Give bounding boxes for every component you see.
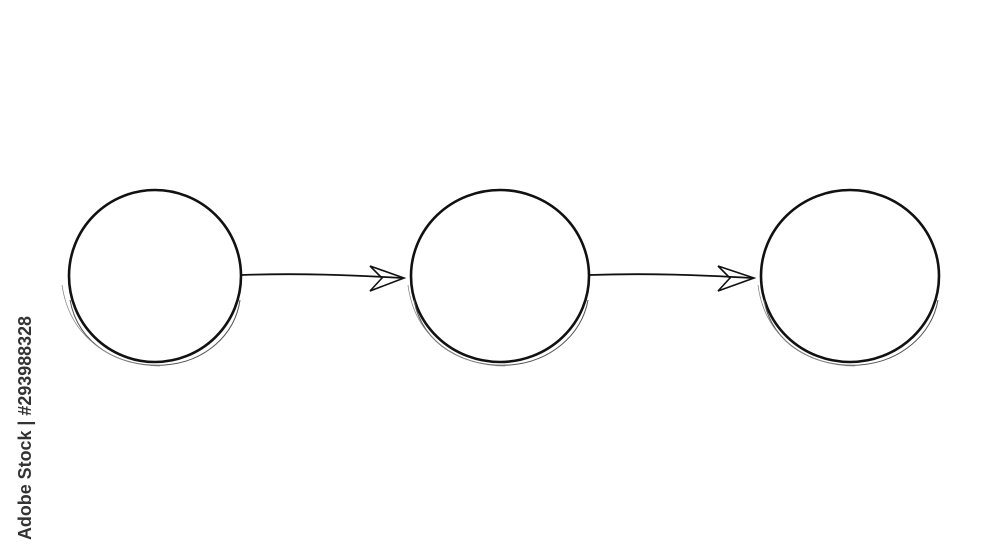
circle 3 xyxy=(758,190,939,366)
circle 2 xyxy=(408,190,589,366)
arrow 2 xyxy=(590,266,754,291)
circle 1 xyxy=(62,190,241,366)
arrow 1 xyxy=(242,266,404,291)
watermark id text: Adobe Stock | #293988328 xyxy=(15,316,35,540)
